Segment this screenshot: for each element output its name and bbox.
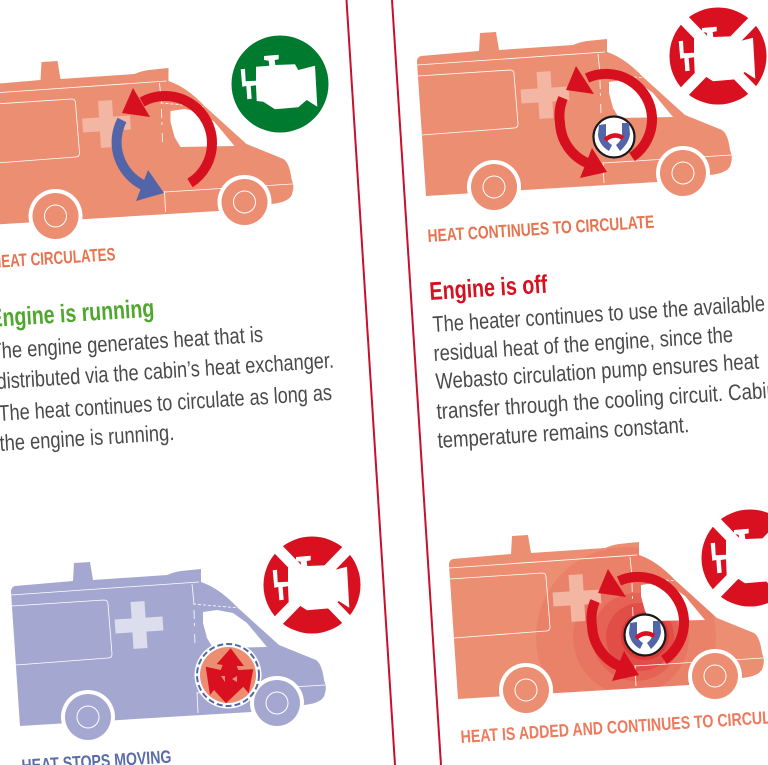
text: engine off description: temperature remains constant. xyxy=(437,412,690,453)
icon: circulation pump xyxy=(624,614,666,656)
panel: engine is off xyxy=(417,8,768,453)
icon: engine off xyxy=(264,536,360,634)
icon: engine off xyxy=(702,510,768,606)
panel: engine is running xyxy=(0,36,335,456)
panel: heat stops moving xyxy=(11,536,360,765)
ambulance: heat continues to circulate xyxy=(417,32,732,214)
panel: heat is added xyxy=(449,510,768,747)
text: engine running description: distributed via the cabin’s heat exchanger. xyxy=(0,348,335,394)
icon: heat stuck at the heat exchanger xyxy=(194,642,262,708)
arrow: blue cool circulation xyxy=(117,120,164,201)
icon: engine off xyxy=(670,8,766,104)
text: engine off description xyxy=(432,291,768,453)
icon: engine on xyxy=(232,36,328,132)
heading: engine is off: Engine is off xyxy=(429,271,549,306)
ambulance: heat added xyxy=(449,535,764,727)
icon: circulation pump xyxy=(594,116,634,158)
arrows: circulation xyxy=(559,66,652,178)
ambulance: lilac cold van xyxy=(11,562,326,744)
heat glow circles xyxy=(536,547,716,693)
caption: heat continues to circulate: HEAT CONTINUES TO CIRCULATE xyxy=(427,212,655,246)
text: engine running description: the engine is running. xyxy=(0,420,175,456)
arrow: red hot circulation xyxy=(122,88,212,183)
text: engine running description xyxy=(0,322,335,456)
ambulance: heat circulates xyxy=(0,61,293,243)
text: engine running description: The heat continues to circulate as long as xyxy=(0,380,333,426)
